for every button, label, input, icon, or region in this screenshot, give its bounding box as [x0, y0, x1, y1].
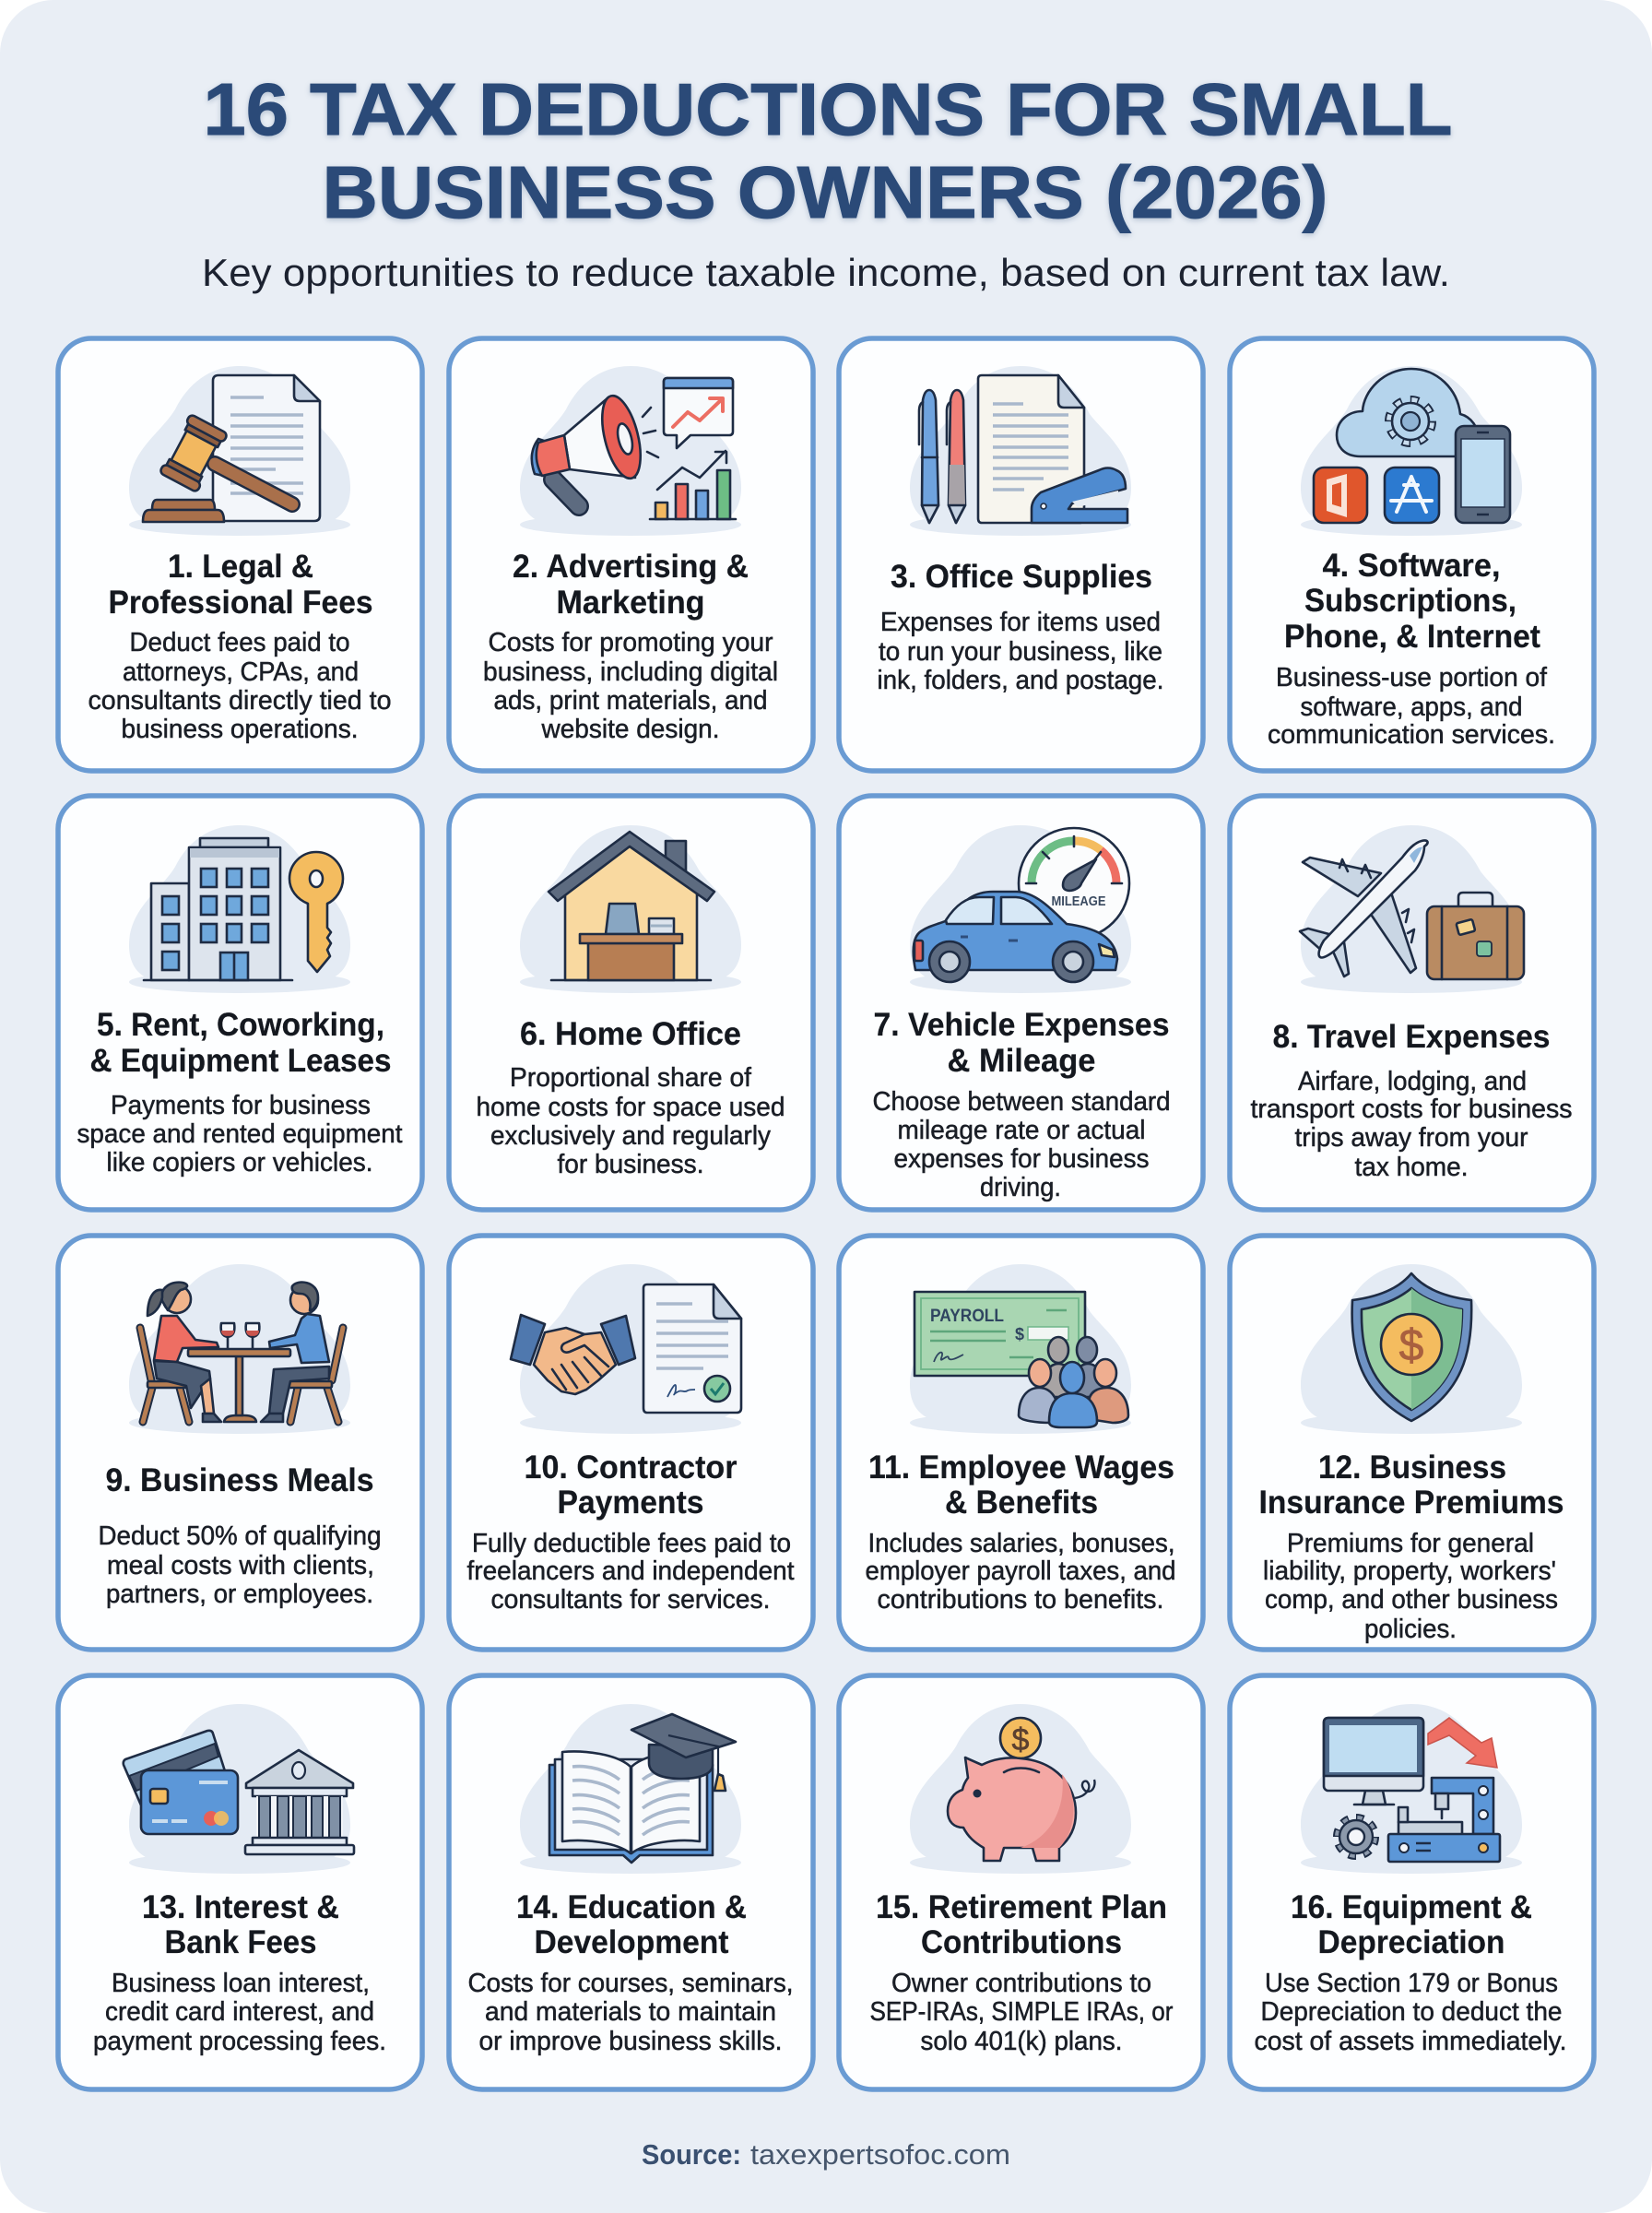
icon: gavel and document: [129, 366, 350, 536]
description: freelancers and independent: [466, 1556, 795, 1586]
heading: [109, 549, 372, 621]
heading: 1. Legal &: [168, 549, 313, 585]
description: Costs for courses, seminars,: [468, 1969, 793, 1998]
card frame: [839, 796, 1203, 1210]
description: [77, 1091, 403, 1178]
description: Payments for business: [111, 1091, 371, 1120]
description: Business loan interest,: [112, 1969, 370, 1998]
panel: 6. Home Office: [449, 796, 813, 1210]
description: payment processing fees.: [93, 2027, 386, 2056]
heading: [1259, 1450, 1564, 1521]
panel: 5. Rent, Coworking, & Equipment Leases: [58, 796, 422, 1210]
heading: & Mileage: [948, 1043, 1095, 1079]
description: Costs for promoting your: [489, 628, 773, 657]
source line: taxexpertsofoc.com: [750, 2138, 1010, 2171]
heading: 7. Vehicle Expenses: [874, 1007, 1169, 1043]
description: [483, 628, 778, 744]
description: Expenses for items used: [880, 608, 1161, 637]
source line: [642, 2138, 1010, 2171]
description: [468, 1969, 793, 2056]
icon: office building and key: [129, 825, 350, 993]
heading: & Benefits: [945, 1485, 1098, 1521]
panel: 14. Education & Development: [449, 1675, 813, 2089]
description: solo 401(k) plans.: [920, 2027, 1123, 2056]
heading: 4. Software,: [1322, 548, 1501, 584]
card frame: [449, 1236, 813, 1650]
card frame: [58, 1236, 422, 1650]
heading: 13. Interest &: [142, 1889, 339, 1925]
panel: 13. Interest & Bank Fees: [58, 1675, 422, 2089]
panel: 1. Legal & Professional Fees: [58, 338, 422, 771]
icon: payroll check and team: [910, 1264, 1131, 1434]
description: [878, 608, 1163, 695]
description: employer payroll taxes, and: [865, 1556, 1176, 1586]
description: mileage rate or actual: [898, 1116, 1145, 1145]
card frame: [58, 338, 422, 771]
description: Deduct fees paid to: [129, 628, 350, 657]
heading: 9. Business Meals: [105, 1462, 374, 1498]
description: [872, 1087, 1171, 1202]
description: expenses for business: [894, 1144, 1149, 1174]
panel: 9. Business Meals: [58, 1236, 422, 1650]
heading: [90, 1007, 391, 1079]
description: [1250, 1067, 1573, 1182]
panel: 12. Business Insurance Premiums: [1230, 1236, 1594, 1650]
heading: [516, 1889, 747, 1960]
card frame: [449, 1675, 813, 2089]
title: 16 TAX DEDUCTIONS FOR SMALL: [203, 68, 1453, 150]
heading: Subscriptions,: [1304, 583, 1516, 619]
panel: 7. Vehicle Expenses & Mileage: [839, 796, 1203, 1210]
description: software, apps, and: [1300, 692, 1523, 722]
heading: [513, 549, 749, 621]
description: [88, 628, 391, 744]
description: like copiers or vehicles.: [107, 1148, 372, 1178]
description: tax home.: [1355, 1153, 1468, 1182]
description: [865, 1529, 1176, 1615]
icon: house with desk: [520, 825, 741, 993]
heading: 6. Home Office: [520, 1016, 741, 1052]
description: Depreciation to deduct the: [1261, 1997, 1562, 2027]
heading: & Equipment Leases: [90, 1043, 391, 1079]
card frame: [58, 796, 422, 1210]
icon: payroll check and team: PAYROLL: [930, 1307, 1004, 1326]
description: comp, and other business: [1265, 1585, 1558, 1615]
card frame: [449, 796, 813, 1210]
heading: Contributions: [921, 1924, 1122, 1960]
card frame: [58, 1675, 422, 2089]
heading: [142, 1889, 339, 1960]
description: Deduct 50% of qualifying: [98, 1521, 382, 1551]
description: [1254, 1969, 1567, 2056]
description: Airfare, lodging, and: [1298, 1067, 1527, 1096]
heading: 5. Rent, Coworking,: [97, 1007, 384, 1043]
description: ads, print materials, and: [494, 686, 767, 716]
card frame: [1230, 1675, 1594, 2089]
description: meal costs with clients,: [107, 1551, 374, 1580]
icon: car and mileage gauge: [910, 825, 1131, 993]
heading: [524, 1450, 738, 1521]
description: Business-use portion of: [1276, 663, 1547, 692]
subtitle: Key opportunities to reduce taxable income, based on current tax law.: [202, 251, 1450, 294]
description: communication services.: [1268, 720, 1555, 750]
description: [476, 1063, 785, 1179]
heading: [1284, 548, 1540, 655]
description: liability, property, workers': [1263, 1556, 1556, 1586]
heading: 16. Equipment &: [1291, 1889, 1532, 1925]
icon: megaphone and charts: [520, 366, 741, 536]
panel: 15. Retirement Plan Contributions: [839, 1675, 1203, 2089]
heading: [868, 1450, 1174, 1521]
description: SEP-IRAs, SIMPLE IRAs, or: [870, 1997, 1174, 2027]
description: exclusively and regularly: [490, 1121, 772, 1151]
heading: 12. Business: [1318, 1450, 1506, 1485]
description: credit card interest, and: [105, 1997, 374, 2027]
heading: [876, 1889, 1167, 1960]
panel: 10. Contractor Payments: [449, 1236, 813, 1650]
panel: 16. Equipment & Depreciation: [1230, 1675, 1594, 2089]
heading: 14. Education &: [516, 1889, 747, 1925]
heading: 11. Employee Wages: [868, 1450, 1174, 1485]
description: Use Section 179 or Bonus: [1265, 1969, 1558, 1998]
description: or improve business skills.: [479, 2027, 782, 2056]
heading: Phone, & Internet: [1284, 619, 1540, 655]
panel: 3. Office Supplies: [839, 338, 1203, 771]
icon: shield with dollar coin: $: [1399, 1321, 1423, 1370]
icon: piggy bank and coin: [910, 1704, 1131, 1874]
heading: Bank Fees: [164, 1924, 317, 1960]
description: for business.: [557, 1150, 704, 1179]
description: consultants directly tied to: [88, 686, 391, 716]
icon: payroll check and team: $: [1015, 1325, 1024, 1343]
description: to run your business, like: [879, 637, 1162, 667]
description: space and rented equipment: [77, 1119, 403, 1149]
title: [203, 68, 1453, 233]
description: [870, 1969, 1174, 2056]
icon: open book and graduation cap: [520, 1704, 741, 1874]
card frame: [1230, 796, 1594, 1210]
description: policies.: [1364, 1615, 1457, 1644]
icon: two people dining: [129, 1264, 350, 1434]
description: business operations.: [122, 715, 358, 744]
description: consultants for services.: [490, 1585, 771, 1615]
icon: cloud, apps and phone: [1301, 366, 1522, 536]
icon: computer, machine and depreciation arrow: [1301, 1704, 1522, 1874]
card frame: [839, 1675, 1203, 2089]
description: Fully deductible fees paid to: [472, 1529, 791, 1558]
description: [93, 1969, 386, 2056]
heading: Insurance Premiums: [1259, 1485, 1564, 1521]
description: contributions to benefits.: [878, 1585, 1163, 1615]
icon: pens, paper and stapler: [910, 366, 1131, 536]
description: Includes salaries, bonuses,: [868, 1529, 1174, 1558]
heading: 15. Retirement Plan: [876, 1889, 1167, 1925]
heading: [1291, 1889, 1532, 1960]
panel: 8. Travel Expenses: [1230, 796, 1594, 1210]
panel: 2. Advertising & Marketing: [449, 338, 813, 771]
heading: 2. Advertising &: [513, 549, 749, 585]
description: [1268, 663, 1555, 750]
description: ink, folders, and postage.: [878, 666, 1163, 695]
card frame: [839, 1236, 1203, 1650]
description: trips away from your: [1294, 1123, 1528, 1153]
description: Premiums for general: [1287, 1529, 1534, 1558]
icon: airplane and suitcase: [1300, 825, 1524, 993]
icon: handshake and signed contract: [511, 1264, 741, 1434]
heading: Development: [535, 1924, 729, 1960]
heading: [874, 1007, 1169, 1079]
heading: 8. Travel Expenses: [1272, 1019, 1551, 1055]
heading: Depreciation: [1318, 1924, 1504, 1960]
heading: 10. Contractor: [524, 1450, 738, 1485]
description: business, including digital: [483, 657, 778, 687]
heading: 3. Office Supplies: [891, 559, 1152, 595]
card frame: [1230, 1236, 1594, 1650]
description: attorneys, CPAs, and: [123, 657, 359, 687]
heading: Professional Fees: [109, 585, 372, 621]
icon: credit cards and bank: [124, 1704, 354, 1874]
description: cost of assets immediately.: [1254, 2027, 1567, 2056]
description: partners, or employees.: [106, 1580, 373, 1609]
icon: shield with dollar coin: [1301, 1264, 1522, 1434]
card frame: [1230, 338, 1594, 771]
description: and materials to maintain: [485, 1997, 776, 2027]
description: driving.: [980, 1173, 1061, 1202]
description: Proportional share of: [510, 1063, 751, 1093]
description: Choose between standard: [872, 1087, 1171, 1117]
source line: Source:: [642, 2138, 741, 2171]
panel: 4. Software, Subscriptions, Phone, & Internet: [1230, 338, 1594, 771]
description: Owner contributions to: [891, 1969, 1151, 1998]
heading: Payments: [557, 1485, 704, 1521]
card frame: [839, 338, 1203, 771]
description: [1263, 1529, 1558, 1644]
heading: Marketing: [557, 585, 704, 621]
card frame: [449, 338, 813, 771]
description: [98, 1521, 382, 1609]
icon: piggy bank and coin: $: [1012, 1722, 1030, 1757]
description: [466, 1529, 795, 1615]
description: website design.: [541, 715, 719, 744]
description: transport costs for business: [1250, 1095, 1573, 1124]
title: BUSINESS OWNERS (2026): [323, 151, 1328, 233]
description: home costs for space used: [476, 1093, 785, 1122]
panel: 11. Employee Wages & Benefits: [839, 1236, 1203, 1650]
icon: car and mileage gauge: MILEAGE: [1051, 894, 1106, 909]
